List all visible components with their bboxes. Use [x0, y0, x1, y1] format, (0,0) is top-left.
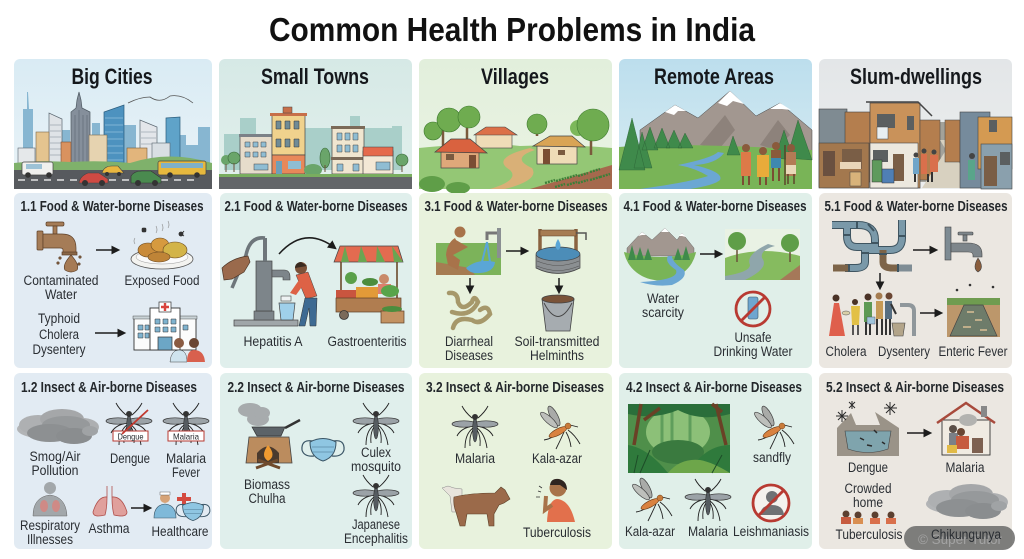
icon: worm: [449, 293, 490, 328]
arrow: down: [879, 273, 881, 288]
panel: 4.1 Food and Water-borne Diseases, Remote Areas: [619, 193, 812, 368]
icon: open drain: [947, 284, 1000, 337]
label: Healthcare: [152, 524, 208, 539]
label: Chulha: [248, 491, 286, 506]
icon: tangled pipes: [832, 220, 912, 272]
panel: Villages header: [419, 59, 612, 194]
label: Enteric Fever: [938, 344, 1008, 359]
heading: 4.2: 4.2 Insect & Air-borne Diseases: [626, 380, 802, 396]
label: Hepatitis A: [244, 334, 302, 349]
label: Dengue: [848, 460, 888, 475]
icon: no person sign: [753, 485, 789, 521]
icon: exposed food plate: [131, 221, 193, 269]
panel: 1.1 Food and Water-borne Diseases, Big Cities: [14, 193, 212, 368]
heading: 4.1: 4.1 Food & Water-borne Diseases: [624, 199, 806, 215]
arrow: [96, 249, 118, 251]
icon: dirty tap: [945, 227, 982, 272]
label: Biomass: [244, 477, 290, 492]
label: Helminths: [530, 348, 584, 363]
arrow: [95, 332, 124, 334]
panel: Slum-dwellings header: [819, 59, 1012, 189]
icon: face mask: [176, 503, 210, 521]
label: Tuberculosis: [523, 525, 591, 540]
label: Kala-azar: [625, 524, 675, 539]
icon: sandfly: [631, 477, 672, 521]
panel: 2.2 Insect and Air-borne Diseases, Small Towns: [220, 373, 412, 549]
label: Malaria: [688, 524, 728, 539]
illustration: city skyline: [14, 92, 212, 189]
label: Asthma: [88, 521, 130, 536]
icon: smog cloud: [926, 484, 1008, 519]
heading: 3.2: 3.2 Insect & Air-borne Diseases: [426, 380, 604, 396]
heading: 3.1: 3.1 Food & Water-borne Diseases: [424, 199, 608, 215]
icon: malaria mosquito: [163, 403, 209, 445]
label: Crowded: [844, 481, 892, 496]
icon: doctor: [154, 492, 191, 518]
label: Dysentery: [32, 342, 86, 357]
panel: 5.2 Insect and Air-borne Diseases, Slum-dwellings: [819, 373, 1012, 549]
label: home: [853, 495, 883, 510]
label: sandfly: [753, 450, 791, 465]
icon: hospital with staff: [133, 302, 205, 362]
illustration: small town street: [219, 107, 412, 189]
icon: culex mosquito: [353, 403, 399, 445]
panel: Remote Areas header: [619, 59, 812, 189]
label: Dengue: [110, 451, 150, 466]
label: Malaria: [946, 460, 985, 475]
label: Pollution: [32, 463, 78, 478]
label: Dysentery: [878, 344, 930, 359]
illustration: mountains, forest and villagers: [619, 91, 812, 189]
icon: mosquito: [452, 406, 498, 448]
illustration: forest: [628, 404, 730, 473]
icon: stagnant water pit with insects: [836, 401, 899, 456]
icon: lungs: [93, 486, 127, 516]
panel: 4.2 Insect and Air-borne Diseases, Remote Areas: [619, 373, 812, 549]
icon: coughing person: [536, 479, 575, 522]
arrow: [913, 249, 936, 251]
icon: torso with lungs: [33, 482, 67, 516]
title: Common Health Problems in India: [269, 11, 756, 48]
label: Malaria: [455, 451, 495, 466]
icon: contaminated tap: [37, 222, 81, 272]
icon: smog cloud: [17, 409, 99, 444]
label: Respiratory: [20, 518, 80, 533]
icon: cow: [442, 486, 510, 526]
heading: Slum-dwellings: Slum-dwellings: [850, 64, 982, 89]
label: Unsafe: [734, 330, 772, 345]
watermark: © Super Tutor: [918, 532, 1002, 547]
label: Culex: [361, 445, 391, 460]
label: Drinking Water: [714, 344, 793, 359]
label: Soil-transmitted: [514, 334, 600, 349]
icon: well: [536, 229, 586, 274]
heading: Remote Areas: Remote Areas: [654, 64, 774, 89]
icon: crowd of people: [841, 510, 896, 524]
arrow: [131, 507, 150, 509]
icon: person near tap: [436, 226, 501, 275]
arrow: [700, 253, 721, 255]
label: Contaminated: [24, 273, 98, 288]
icon: bucket: [542, 295, 574, 331]
heading: Small Towns: Small Towns: [261, 64, 369, 89]
icon: sandfly: [753, 405, 794, 449]
icon: mosquito: [685, 479, 731, 521]
icon: people queue at tap: [829, 292, 914, 336]
icon: malaria mosquito: Malaria: [173, 432, 199, 442]
label: Kala-azar: [532, 451, 582, 466]
label: Smog/Air: [30, 449, 81, 464]
arrow: curved: [279, 238, 335, 254]
label: mosquito: [351, 459, 401, 474]
icon: person at pump with bucket: [279, 262, 317, 326]
label: Tuberculosis: [836, 527, 903, 542]
icon: polluted stream: [725, 229, 800, 280]
icon: japanese encephalitis mosquito: [353, 475, 399, 517]
label: Encephalitis: [344, 531, 408, 546]
panel: Big Cities header: [14, 59, 212, 189]
arrow: [920, 312, 941, 314]
icon: dengue mosquito: Dengue: [118, 432, 144, 442]
label: Japanese: [352, 517, 400, 532]
label: Diseases: [445, 348, 493, 363]
heading: Big Cities: Big Cities: [72, 64, 152, 89]
panel: 1.2 Insect and Air-borne Diseases, Big Cities: [14, 373, 212, 549]
label: Water: [45, 287, 77, 302]
heading: 1.2: 1.2 Insect & Air-borne Diseases: [21, 380, 197, 396]
icon: crowded smoky house: [937, 403, 995, 455]
icon: smoke: [238, 403, 270, 426]
icon: hand pump: [222, 238, 298, 326]
label: Chikungunya: [931, 527, 1001, 542]
label: Cholera: [39, 327, 79, 342]
watermark: [904, 526, 1015, 550]
label: Gastroenteritis: [328, 334, 407, 349]
label: Water: [647, 291, 679, 306]
panel: 2.1 Food and Water-borne Diseases, Small Towns: [220, 193, 412, 368]
label: Leishmaniasis: [733, 524, 809, 539]
label: scarcity: [642, 305, 684, 320]
arrow: [907, 432, 930, 434]
panel: 5.1 Food and Water-borne Diseases, Slum-dwellings: [819, 193, 1012, 368]
heading: 2.2: 2.2 Insect & Air-borne Diseases: [228, 380, 404, 396]
label: Typhoid: [38, 311, 80, 326]
label: Diarrheal: [445, 334, 493, 349]
icon: sandfly: [539, 405, 580, 449]
panel: 3.2 Insect and Air-borne Diseases, Villages: [419, 373, 612, 549]
heading: 1.1: 1.1 Food & Water-borne Diseases: [20, 199, 204, 215]
label: Cholera: [826, 344, 867, 359]
icon: no bottle: [736, 292, 770, 326]
panel: Small Towns header: [219, 59, 412, 189]
label: Malaria: [166, 451, 206, 466]
icon: dengue mosquito: [106, 403, 152, 445]
heading: Villages: Villages: [481, 64, 549, 89]
heading: 2.1: 2.1 Food & Water-borne Diseases: [224, 199, 408, 215]
illustration: village: [419, 106, 612, 194]
label: Fever: [172, 465, 200, 480]
icon: vegetable stall: [334, 246, 404, 323]
label: Exposed Food: [124, 273, 200, 288]
arrow: [506, 250, 527, 252]
illustration: slum lane: [819, 102, 1012, 189]
panel: 3.1 Food and Water-borne Diseases, Villages: [419, 193, 612, 368]
label: Illnesses: [27, 532, 73, 547]
icon: biomass chulha stove: [246, 420, 300, 468]
arrows: down: [470, 278, 559, 292]
icon: face mask: [302, 438, 344, 461]
icon: mountain river circle: [624, 228, 696, 286]
